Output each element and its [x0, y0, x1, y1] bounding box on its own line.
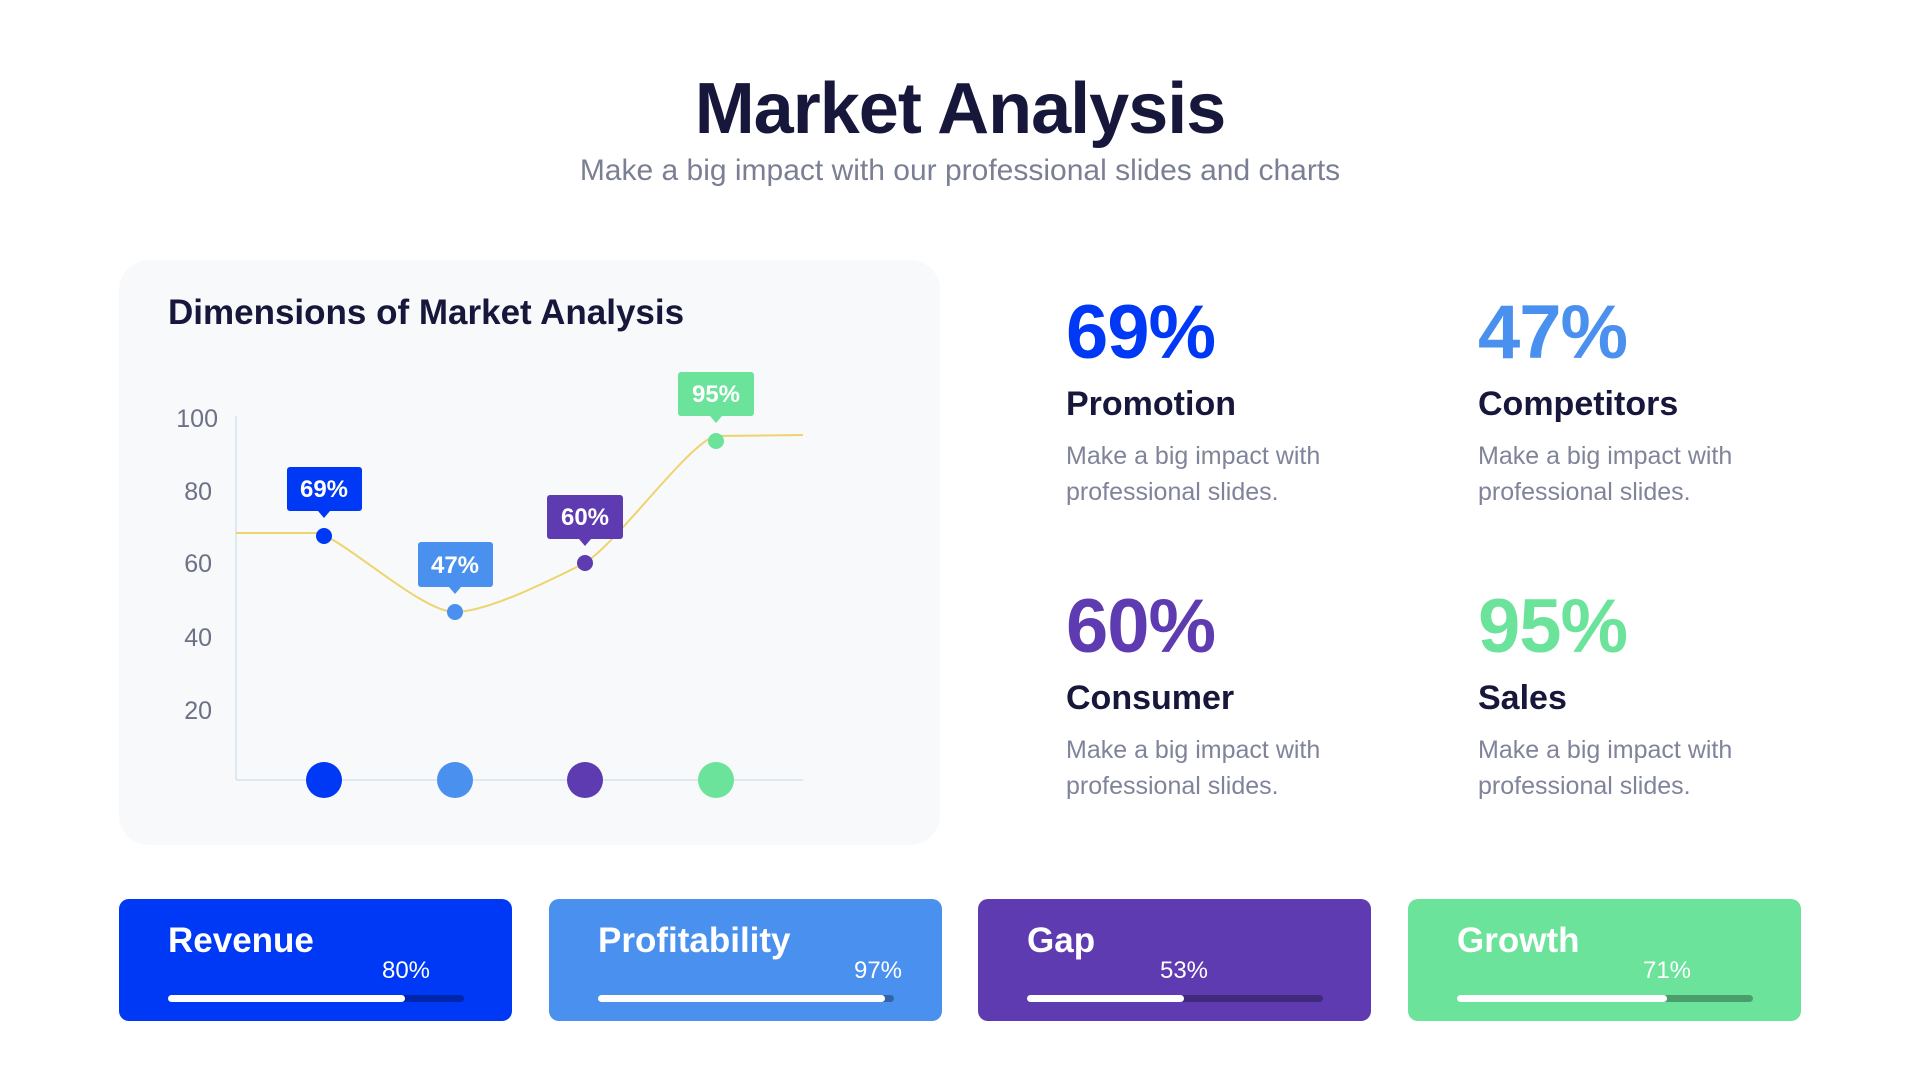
stat: promotion: 69%: [1066, 290, 1215, 375]
stat: promotion: Make a big impact with: [1066, 442, 1320, 470]
chart heading: Dimensions of Market Analysis: [168, 293, 684, 332]
stat: promotion: [1066, 290, 1320, 506]
callouts: 69%: [300, 476, 348, 503]
stat: promotion: Promotion: [1066, 385, 1236, 423]
stat: consumer: professional slides.: [1066, 772, 1279, 800]
stat: sales: 95%: [1478, 584, 1627, 669]
subtitle: Make a big impact with our professional slides and charts: [580, 154, 1340, 187]
card: revenue: Revenue: [168, 921, 314, 960]
stat: consumer: 60%: [1066, 584, 1215, 669]
stat: sales: [1478, 584, 1732, 800]
callouts: 60%: [561, 504, 609, 531]
stat: competitors: Competitors: [1478, 385, 1678, 423]
callouts: [287, 372, 754, 594]
stat: promotion: professional slides.: [1066, 478, 1279, 506]
stat: sales: Make a big impact with: [1478, 736, 1732, 764]
y axis labels: 100: [176, 405, 218, 433]
stat: consumer: [1066, 584, 1320, 800]
y axis labels: [176, 405, 218, 725]
stat: competitors: Make a big impact with: [1478, 442, 1732, 470]
card: growth: [1408, 899, 1801, 1021]
card: profitability: 97%: [854, 957, 902, 984]
stat: competitors: [1478, 290, 1732, 506]
y axis labels: 60: [184, 550, 212, 578]
y axis labels: 20: [184, 697, 212, 725]
title: Market Analysis: [695, 69, 1225, 149]
line chart: [236, 433, 803, 620]
stat: competitors: 47%: [1478, 290, 1627, 375]
callouts: 47%: [431, 552, 479, 579]
stat: sales: Sales: [1478, 679, 1567, 717]
card: gap: Gap: [1027, 921, 1095, 960]
card: profitability: [549, 899, 942, 1021]
callouts: 95%: [692, 381, 740, 408]
card: revenue: 80%: [382, 957, 430, 984]
y axis labels: 80: [184, 478, 212, 506]
stat: consumer: Make a big impact with: [1066, 736, 1320, 764]
y axis labels: 40: [184, 624, 212, 652]
card: gap: [978, 899, 1371, 1021]
card: revenue: [119, 899, 512, 1021]
card: growth: Growth: [1457, 921, 1579, 960]
stat: sales: professional slides.: [1478, 772, 1691, 800]
card: gap: 53%: [1160, 957, 1208, 984]
card: growth: 71%: [1643, 957, 1691, 984]
card: profitability: Profitability: [598, 921, 791, 960]
panel: chart: [119, 260, 940, 845]
stat: competitors: professional slides.: [1478, 478, 1691, 506]
category dots: [306, 762, 734, 798]
stat: consumer: Consumer: [1066, 679, 1234, 717]
